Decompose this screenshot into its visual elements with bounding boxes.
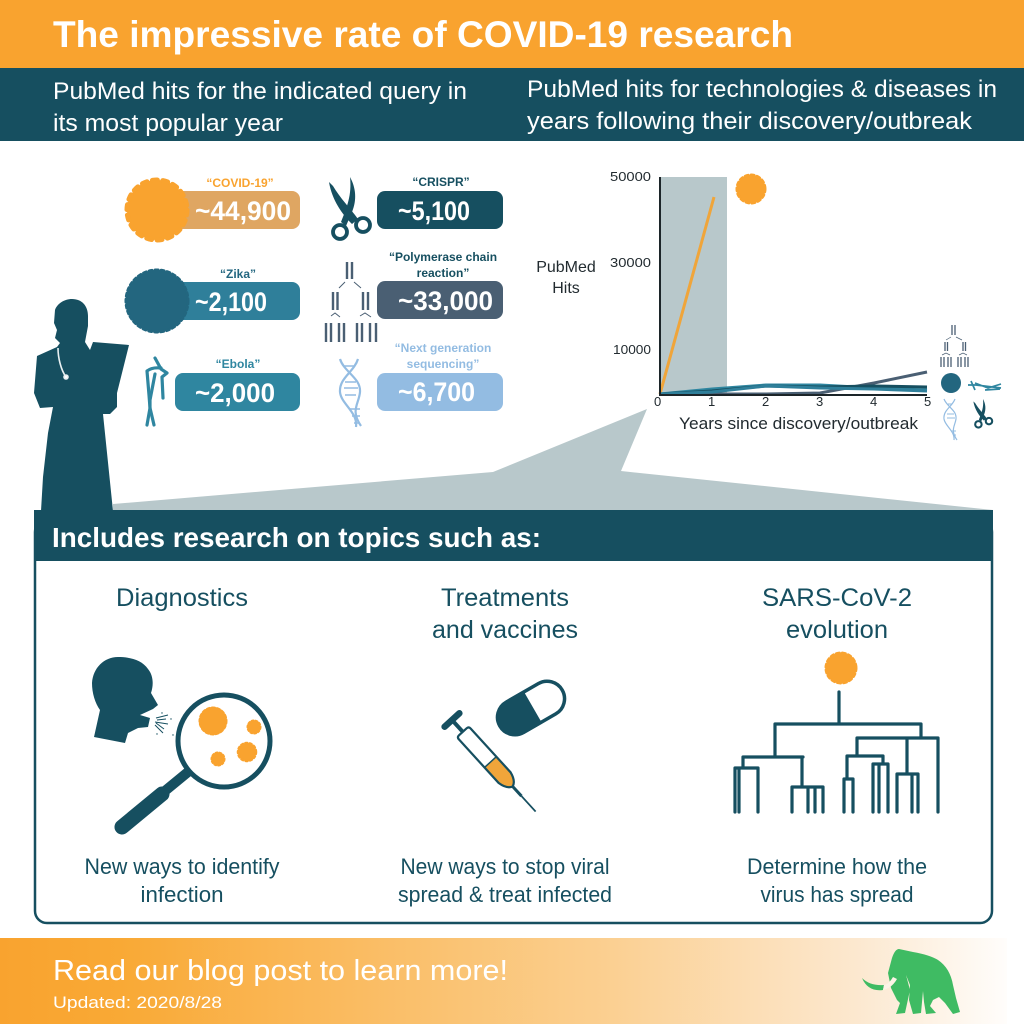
y axis label: PubMed [536, 259, 596, 276]
icon: coughing head [92, 657, 174, 743]
icon: virus above tree [826, 653, 856, 683]
left subheading: PubMed hits for the indicated query in [53, 78, 467, 105]
y axis label: Hits [552, 280, 580, 297]
icon: PCR marker [941, 325, 968, 367]
column: treatments: and vaccines [432, 616, 578, 644]
stat: Polymerase chain reaction: reaction” [417, 266, 469, 280]
stat: CRISPR [329, 175, 503, 239]
stat: Ebola: ~2,000 [195, 378, 275, 408]
line chart [536, 169, 1001, 440]
diagnostics caption: infection [140, 882, 224, 907]
y axis ticks: 10000 [613, 342, 651, 357]
x axis ticks: 0 [654, 394, 661, 409]
orange COVID line [660, 197, 714, 394]
panel heading: Includes research on topics such as: [52, 522, 541, 553]
header: title banner [0, 0, 1024, 68]
treatments caption: New ways to stop viral [400, 854, 610, 879]
evolution caption [747, 854, 927, 907]
right subheading: PubMed hits for technologies & diseases in [527, 76, 997, 103]
treatments caption [398, 854, 612, 907]
icon: mammoth logo [862, 949, 960, 1014]
stat: COVID-19 [127, 176, 300, 240]
icon: syringe [445, 713, 543, 818]
icon: coronavirus [127, 180, 187, 240]
stat: Ebola: “Ebola” [216, 357, 260, 371]
icon: DNA marker [944, 399, 957, 440]
title: The impressive rate of COVID-19 research [53, 14, 793, 55]
left subheading [53, 78, 467, 137]
y axis ticks: 30000 [610, 255, 651, 270]
x axis ticks: 1 [708, 394, 715, 409]
stat: Polymerase chain reaction [326, 250, 503, 342]
icon: DNA helix [340, 359, 361, 427]
stat: Polymerase chain reaction: “Polymerase chain [389, 250, 497, 264]
evolution caption: virus has spread [760, 882, 914, 907]
column: diagnostics [84, 584, 280, 907]
stat: COVID-19: “COVID-19” [206, 176, 274, 190]
column: evolution: SARS-CoV-2 [762, 584, 912, 612]
x axis ticks [654, 394, 931, 409]
axes [660, 177, 927, 395]
doctor silhouette [34, 299, 129, 511]
left subheading: its most popular year [53, 110, 283, 137]
icon: magnifying glass [122, 695, 270, 827]
diagnostics caption [84, 854, 280, 907]
stat: Ebola [147, 357, 300, 425]
icon: scissors [329, 177, 370, 239]
stat: Next generation sequencing: sequencing” [407, 357, 479, 371]
icon: PCR tree [326, 262, 376, 342]
stat: Next generation sequencing [340, 341, 503, 427]
icon: COVID marker [737, 175, 765, 203]
column: evolution [735, 584, 938, 907]
y axis label [536, 259, 596, 297]
subheader band [0, 68, 1024, 141]
x axis ticks: 5 [924, 394, 931, 409]
update date: Updated: 2020/8/28 [53, 993, 222, 1012]
stat: COVID-19: ~44,900 [195, 196, 291, 226]
callout wedge from chart to panel [113, 409, 993, 511]
icon: pill [489, 674, 572, 743]
y axis ticks [610, 169, 651, 357]
stat: Zika: “Zika” [220, 267, 256, 281]
panel heading [34, 510, 993, 561]
right subheading [527, 76, 997, 135]
footer call to action: Read our blog post to learn more! [53, 955, 508, 987]
x axis ticks: 3 [816, 394, 823, 409]
x axis ticks: 2 [762, 394, 769, 409]
treatments caption: spread & treat infected [398, 882, 612, 907]
icon: ebola filament [147, 358, 167, 425]
evolution caption: Determine how the [747, 854, 927, 879]
icon: zika virus [126, 270, 188, 332]
stethoscope [58, 348, 68, 379]
stat: CRISPR: ~5,100 [398, 196, 470, 226]
footer band [0, 938, 1007, 1024]
icon: Zika marker [941, 373, 961, 393]
y axis ticks: 50000 [610, 169, 651, 184]
stat: Next generation sequencing: ~6,700 [398, 377, 475, 407]
column: diagnostics: Diagnostics [116, 584, 248, 612]
stat: Zika [126, 267, 300, 332]
stat: CRISPR: “CRISPR” [412, 175, 470, 189]
column: evolution: evolution [786, 616, 888, 644]
x axis ticks: 4 [870, 394, 877, 409]
column: treatments: Treatments [441, 584, 569, 612]
panel: research topics [34, 510, 993, 923]
diagnostics caption: New ways to identify [84, 854, 280, 879]
x axis label: Years since discovery/outbreak [679, 414, 919, 433]
stat: Next generation sequencing: “Next generation [395, 341, 491, 355]
other lines [660, 372, 927, 394]
right subheading: years following their discovery/outbreak [527, 108, 973, 135]
stat: Zika: ~2,100 [195, 287, 267, 317]
phylogenetic tree [735, 692, 938, 812]
column: treatments [398, 584, 612, 907]
stat: Polymerase chain reaction: ~33,000 [398, 286, 493, 316]
icon: Ebola marker [968, 381, 1001, 390]
icon: scissors marker [973, 399, 992, 428]
